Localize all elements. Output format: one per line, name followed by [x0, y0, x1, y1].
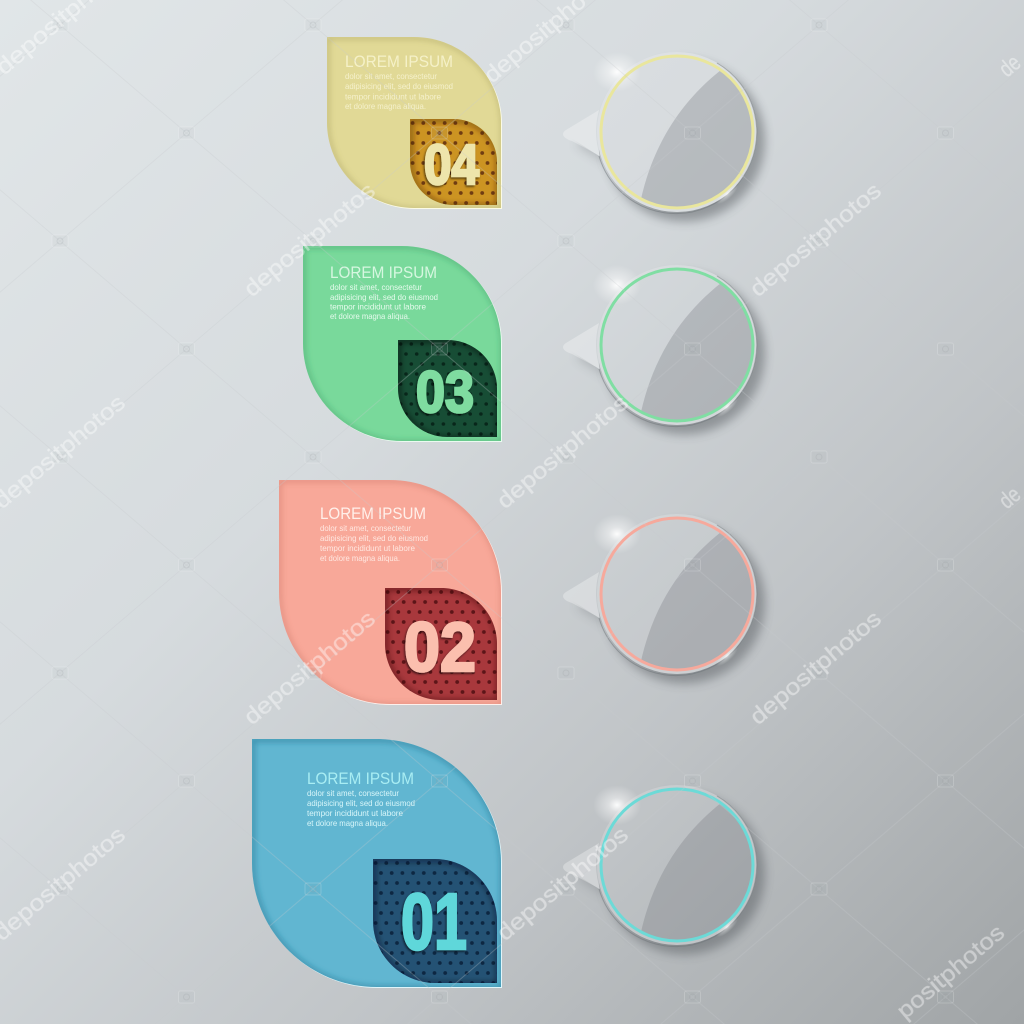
- text block: 02: et dolore magna aliqua.: [320, 553, 400, 563]
- text block: 04: tempor incididunt ut labore: [345, 92, 441, 102]
- text block: 02: adipisicing elit, sed do eiusmod: [320, 533, 428, 543]
- panel: leaf 03 (green): [303, 246, 502, 442]
- number panel: 02: 02: [404, 608, 476, 686]
- glass bubble: 02: [563, 514, 765, 684]
- text block: 02: tempor incididunt ut labore: [320, 543, 415, 553]
- text block: 01: [307, 788, 415, 828]
- watermark text: depositphotos: [745, 177, 886, 302]
- text block: 03: dolor sit amet, consectetur: [330, 282, 422, 292]
- watermark text: depositphotos: [492, 821, 633, 946]
- heading: 02: LOREM IPSUM: [320, 505, 426, 523]
- glass bubble: 04: [563, 52, 765, 222]
- text block: 04: adipisicing elit, sed do eiusmod: [345, 81, 453, 91]
- watermark text: depositphotos: [239, 605, 380, 730]
- glass bubble: 01: [563, 785, 765, 955]
- panel: leaf 02 (pink): [279, 480, 502, 705]
- text block: 01: adipisicing elit, sed do eiusmod: [307, 798, 415, 808]
- text block: 03: tempor incididunt ut labore: [330, 302, 426, 312]
- glass bubble: 03: [563, 265, 765, 435]
- heading: 01: LOREM IPSUM: [307, 770, 414, 788]
- text block: 04: [345, 71, 453, 111]
- text block: 01: et dolore magna aliqua.: [307, 818, 388, 828]
- watermark text: depositphotos: [745, 605, 886, 730]
- watermark text: positphotos: [892, 919, 1009, 1024]
- text block: 03: et dolore magna aliqua.: [330, 311, 410, 321]
- number panel: 04: [410, 119, 498, 206]
- number panel: 03: [398, 340, 498, 438]
- panel: leaf 04 (yellow): [327, 37, 502, 209]
- number panel: 01: [373, 859, 498, 984]
- number panel: 03: 03: [416, 360, 474, 425]
- number panel: 02: [385, 588, 498, 701]
- text block: 04: dolor sit amet, consectetur: [345, 71, 437, 81]
- panel: leaf 01 (blue): [252, 739, 502, 988]
- text block: 01: dolor sit amet, consectetur: [307, 788, 399, 798]
- heading: 04: LOREM IPSUM: [345, 53, 453, 71]
- number panel: 01: 01: [401, 877, 467, 966]
- text block: 02: dolor sit amet, consectetur: [320, 523, 411, 533]
- text block: 03: adipisicing elit, sed do eiusmod: [330, 292, 438, 302]
- number panel: 04: 04: [424, 133, 479, 197]
- text block: 03: [330, 282, 438, 321]
- watermark text: depositphotos: [492, 389, 633, 514]
- text block: 02: [320, 523, 428, 563]
- text block: 04: et dolore magna aliqua.: [345, 101, 426, 111]
- heading: 03: LOREM IPSUM: [330, 264, 437, 282]
- watermark text: depositphotos: [239, 177, 380, 302]
- text block: 01: tempor incididunt ut labore: [307, 808, 403, 818]
